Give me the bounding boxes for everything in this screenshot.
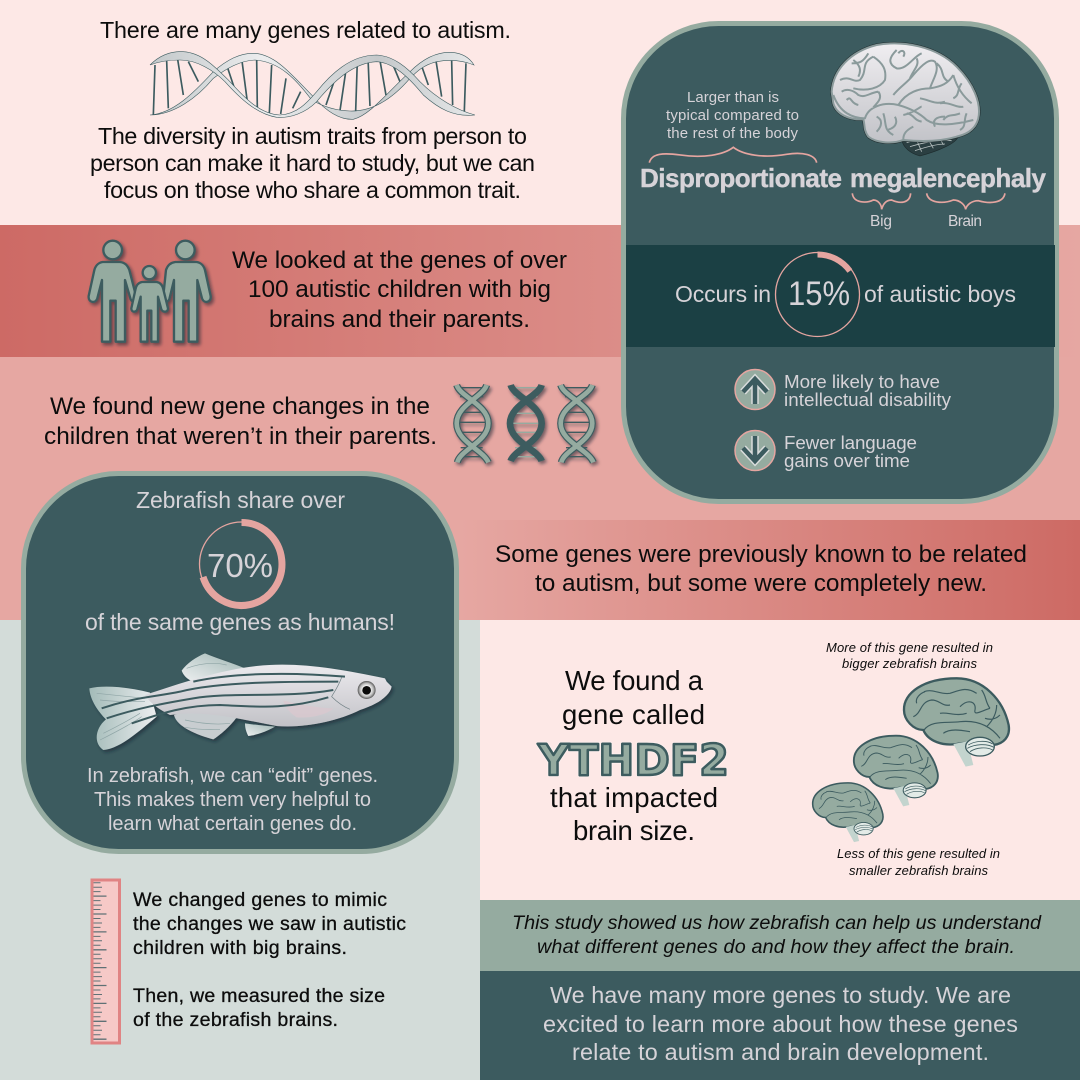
text: disproportionate megalencephaly (640, 163, 1047, 193)
text: editing genes in zebrafish (87, 765, 378, 835)
brace: disproportionate (649, 147, 817, 163)
icon: zebrafish (89, 653, 392, 750)
text: definition of disproportionate (666, 89, 799, 142)
text: impacted brain size: that impacted (550, 782, 718, 813)
text: intellectual disability (784, 371, 952, 410)
text: found a gene called: We found a (565, 665, 704, 696)
text: definition of disproportionate: the rest of the body (667, 125, 798, 142)
panel background (624, 24, 1056, 502)
text: looked at genes: 100 autistic children with big (248, 276, 551, 303)
text: changed genes (133, 889, 406, 959)
bottom left background (0, 620, 480, 1080)
icon: grey brain (832, 43, 979, 156)
text: intellectual disability: More likely to have (784, 371, 940, 392)
text: changed genes: children with big brains. (133, 937, 347, 959)
caption: less gene (837, 846, 1000, 878)
brace: brain (927, 193, 1005, 209)
caption: less gene: smaller zebrafish brains (849, 863, 988, 878)
text: new gene changes: We found new gene changes in the (50, 393, 430, 420)
text: impacted brain size: brain size. (573, 815, 695, 846)
text: looked at genes: We looked at the genes of over (232, 247, 567, 274)
text: disproportionate megalencephaly: megalencephaly (850, 163, 1047, 193)
text: intellectual disability: intellectual disability (784, 389, 952, 410)
chart: 70 percent ring: 70% (207, 547, 273, 584)
icon: three green brains (813, 678, 1009, 842)
text: disproportionate megalencephaly: Disproportionate (640, 163, 842, 193)
icon: family of parents and child (89, 241, 211, 342)
bottom right background (480, 620, 1080, 900)
text: definition of disproportionate: typical compared to (666, 107, 799, 124)
text: new gene changes (44, 393, 437, 450)
text: diversity in autism traits: person can make it hard to study, but we can (90, 150, 535, 176)
caption: more gene: More of this gene resulted in (826, 640, 993, 655)
text: measured zebrafish brains (133, 985, 385, 1031)
text: of autistic boys: of autistic boys (864, 281, 1016, 307)
top background (0, 0, 1080, 225)
gene name: YTHDF2: YTHDF2 (537, 736, 729, 786)
text: known and new genes (495, 541, 1027, 597)
text: new gene changes: children that weren’t in their parents. (44, 423, 437, 450)
panel: megalencephaly (624, 24, 1056, 502)
chart: 70 percent ring (200, 522, 284, 606)
text: study conclusion: This study showed us how zebrafish can help us understand (512, 912, 1042, 934)
label: big: Big (870, 213, 892, 230)
text: changed genes: We changed genes to mimic (133, 889, 387, 911)
text: diversity in autism traits (90, 123, 535, 203)
caption: less gene: Less of this gene resulted in (837, 846, 1000, 861)
band: study conclusion background (480, 900, 1080, 971)
text: found a gene called: gene called (562, 699, 705, 730)
band: gene changes background (0, 357, 1080, 620)
brace: big (852, 193, 911, 209)
text: measured zebrafish brains: of the zebrafish brains. (133, 1009, 338, 1031)
icon: up arrow (735, 370, 775, 410)
text: editing genes in zebrafish: learn what certain genes do. (108, 813, 357, 835)
text: language gains (784, 432, 917, 471)
icon: ruler (92, 880, 120, 1043)
text: impacted brain size (550, 782, 718, 846)
band: prevalence (626, 245, 1055, 347)
panel: zebrafish (24, 474, 456, 852)
text: language gains: gains over time (784, 450, 910, 471)
label: brain: Brain (948, 213, 982, 230)
text: study conclusion (512, 912, 1042, 958)
text: found a gene called (562, 665, 705, 730)
icon: horizontal DNA helix (150, 52, 475, 119)
band: future work background (480, 971, 1080, 1080)
text: language gains: Fewer language (784, 432, 917, 453)
text: known and new genes: to autism, but some were completely new. (535, 570, 987, 597)
chart: 15 percent ring (776, 252, 860, 336)
panel background (24, 474, 456, 852)
text: occurs in: Occurs in (675, 281, 771, 307)
text: future work: relate to autism and brain development. (572, 1039, 989, 1065)
text: diversity in autism traits: The diversity in autism traits from person to (98, 123, 527, 149)
band: known and new genes background (460, 520, 1080, 620)
text: editing genes in zebrafish: This makes them very helpful to (94, 789, 371, 811)
text: looked at genes (232, 247, 567, 333)
text: diversity in autism traits: focus on those who share a common trait. (104, 177, 521, 203)
icon: down arrow (735, 430, 775, 470)
caption: more gene (826, 640, 993, 671)
text: many genes: There are many genes related to autism. (100, 17, 511, 43)
text: editing genes in zebrafish: In zebrafish, we can “edit” genes. (87, 765, 378, 787)
text: known and new genes: Some genes were previously known to be related (495, 541, 1027, 568)
text: study conclusion: what different genes do and how they affect the brain. (537, 936, 1015, 958)
text: future work: excited to learn more about how these genes (543, 1011, 1018, 1037)
text: future work: We have many more genes to study. We are (550, 982, 1011, 1008)
text: definition of disproportionate: Larger than is (687, 89, 779, 106)
text: same genes as humans: of the same genes as humans! (85, 609, 395, 635)
text: measured zebrafish brains: Then, we measured the size (133, 985, 385, 1007)
text: zebrafish share: Zebrafish share over (136, 487, 345, 513)
chart: 15 percent ring: 15% (788, 275, 850, 313)
text: looked at genes: brains and their parents. (269, 306, 530, 333)
icon: three vertical DNA strands (457, 385, 593, 462)
text: future work (543, 982, 1018, 1065)
caption: more gene: bigger zebrafish brains (842, 656, 978, 671)
text: changed genes: the changes we saw in autistic (133, 913, 406, 935)
band: parents background (0, 225, 1080, 357)
